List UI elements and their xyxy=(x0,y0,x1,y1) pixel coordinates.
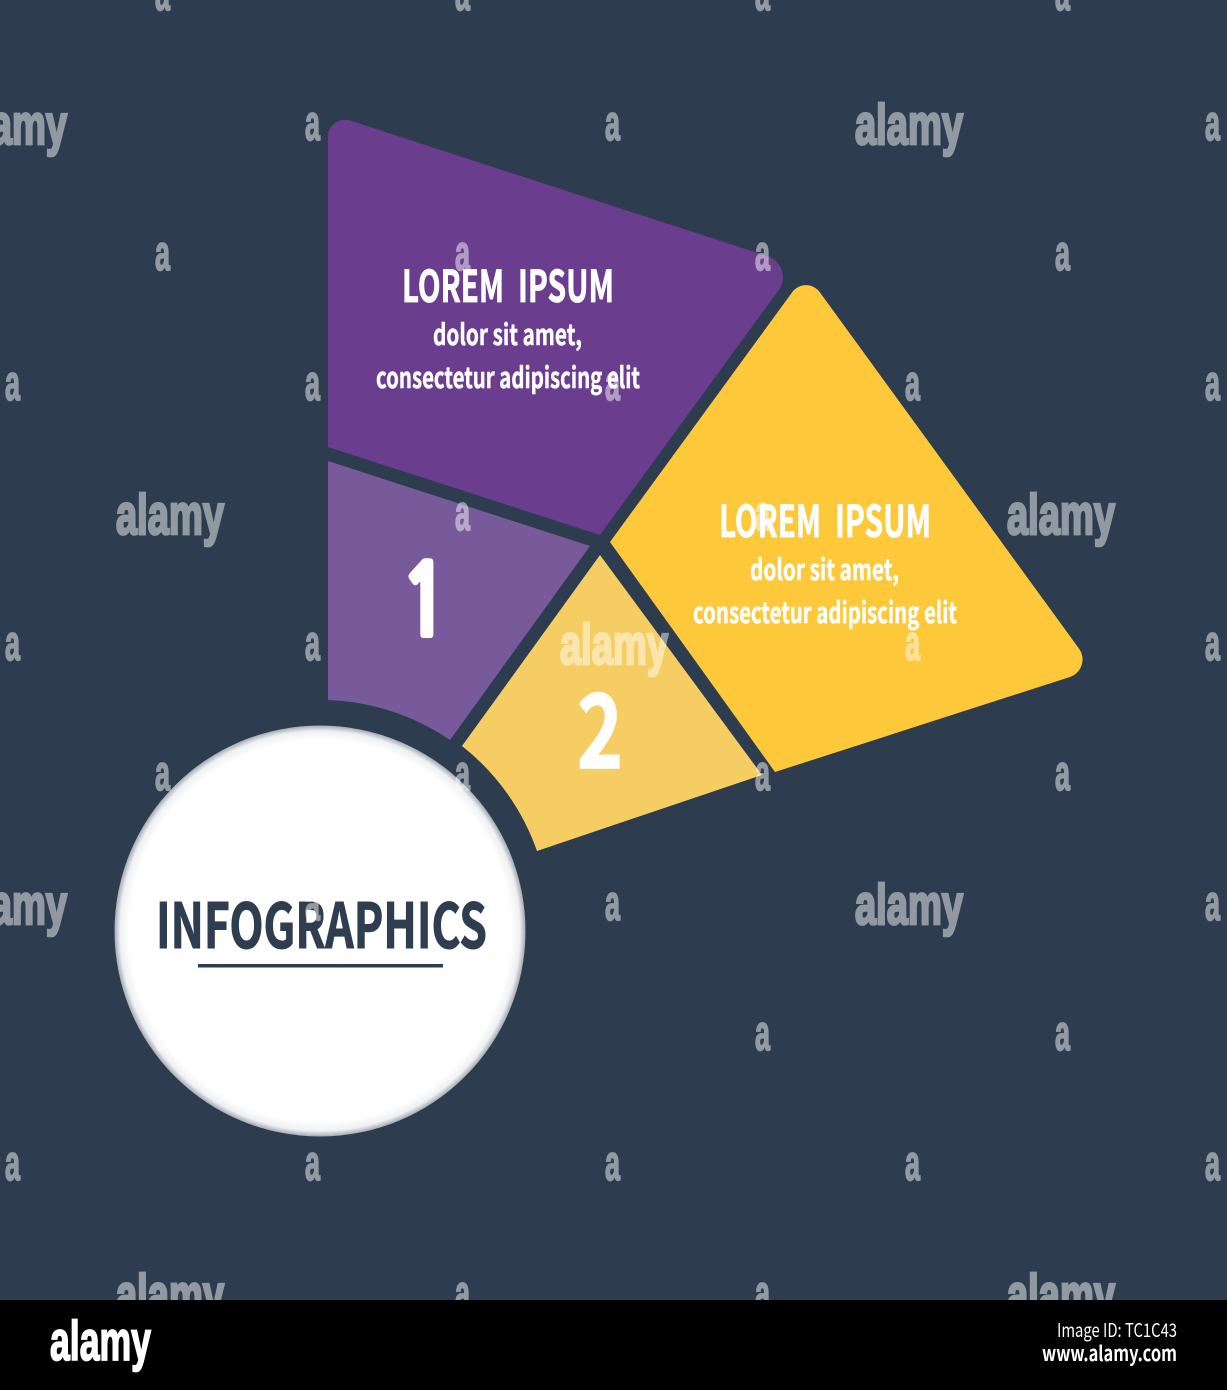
text block: yellow panel line 1: dolor sit amet, xyxy=(750,547,899,589)
watermark pattern: a xyxy=(155,1005,171,1061)
watermark pattern: a xyxy=(1055,225,1071,281)
watermark pattern: a xyxy=(305,355,321,411)
heading: yellow panel title: IPSUM xyxy=(835,486,931,550)
watermark pattern: a xyxy=(455,1265,471,1321)
watermark pattern: alamy xyxy=(855,93,963,157)
watermark pattern: a xyxy=(755,225,771,281)
watermark pattern: a xyxy=(755,745,771,801)
watermark pattern: alamy xyxy=(116,483,224,547)
watermark pattern: a xyxy=(755,1005,771,1061)
heading: yellow panel title: LOREM xyxy=(719,486,821,550)
panel: step 1 lower purple block xyxy=(328,461,590,740)
watermark pattern: a xyxy=(455,745,471,801)
watermark pattern: a xyxy=(5,1135,21,1191)
title underline xyxy=(198,964,443,968)
watermark pattern: a xyxy=(455,485,471,541)
watermark pattern: a xyxy=(305,95,321,151)
heading: purple panel title: IPSUM xyxy=(518,251,614,315)
watermark pattern: a xyxy=(305,1135,321,1191)
watermark pattern: alamy xyxy=(1007,1263,1115,1327)
watermark pattern: a xyxy=(5,355,21,411)
watermark pattern: alamy xyxy=(855,873,963,937)
watermark pattern: a xyxy=(305,875,321,931)
watermark pattern: alamy xyxy=(116,1263,224,1327)
heading: purple panel title: LOREM xyxy=(402,251,504,315)
watermark pattern: a xyxy=(155,225,171,281)
watermark pattern: a xyxy=(605,355,621,411)
watermark pattern: alamy xyxy=(1007,483,1115,547)
panel: step 2 small yellow block xyxy=(462,555,762,851)
number 1: 1 xyxy=(400,553,450,650)
watermark pattern: a xyxy=(1055,745,1071,801)
watermark pattern: a xyxy=(455,225,471,281)
watermark pattern: alamy xyxy=(560,613,668,677)
footer bar xyxy=(0,1300,1227,1390)
white circle xyxy=(114,726,526,1136)
website url: www.alamy.com xyxy=(1042,1338,1177,1368)
watermark pattern: a xyxy=(5,615,21,671)
panel: step 2 large yellow block xyxy=(610,285,1083,772)
panel: step 1 upper purple block xyxy=(328,120,783,535)
watermark pattern: a xyxy=(155,745,171,801)
watermark pattern: a xyxy=(605,1135,621,1191)
watermark pattern: a xyxy=(755,485,771,541)
watermark pattern: a xyxy=(755,1265,771,1321)
watermark pattern: a xyxy=(455,1005,471,1061)
watermark pattern: a xyxy=(605,95,621,151)
number 2: 2 xyxy=(577,649,623,798)
watermark pattern: a xyxy=(905,1135,921,1191)
image id: Image ID: TC1C43 xyxy=(1057,1316,1177,1343)
text block: purple panel line 2: consectetur adipiscing elit xyxy=(376,355,640,397)
text block: yellow panel line 2: consectetur adipiscing elit xyxy=(693,590,957,632)
watermark pattern: a xyxy=(905,615,921,671)
watermark pattern: a xyxy=(605,875,621,931)
watermark pattern: a xyxy=(305,615,321,671)
watermark pattern: a xyxy=(1055,1005,1071,1061)
title: infographics: INFOGRAPHICS xyxy=(156,876,487,966)
text block: purple panel line 1: dolor sit amet, xyxy=(433,312,582,354)
footer logo: alamy xyxy=(50,1309,151,1372)
watermark pattern: a xyxy=(905,355,921,411)
